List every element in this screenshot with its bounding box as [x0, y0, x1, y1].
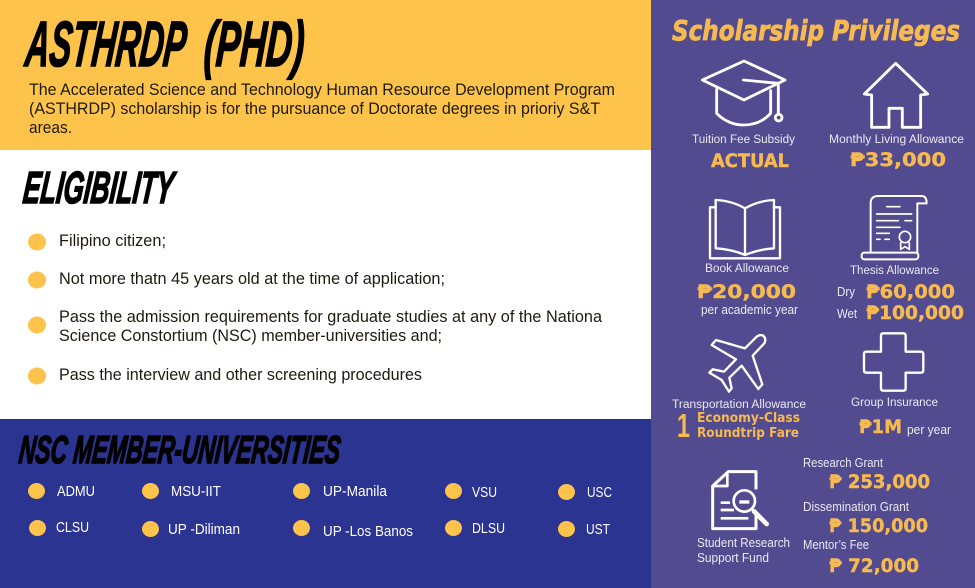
transportation allowance: Economy-Class — [697, 411, 800, 426]
eligibility heading: ELIGIBILITY — [21, 162, 179, 213]
research grant — [803, 455, 930, 493]
university list: CLSU — [56, 519, 89, 536]
icon: airplane — [709, 335, 765, 392]
dissemination grant: ₱ 150,000 — [829, 515, 928, 537]
icon: thesis scroll — [862, 196, 927, 259]
university list: VSU — [472, 484, 497, 501]
program description: (ASTHRDP) scholarship is for the pursuance of Doctorate degrees in prioriy S&T — [29, 100, 600, 118]
transportation allowance — [672, 399, 806, 444]
group insurance: per year — [907, 422, 952, 437]
university list: DLSU — [472, 520, 505, 537]
program description: areas. — [29, 119, 72, 137]
tuition fee subsidy: ACTUAL — [711, 150, 789, 172]
criterion: citizenship: Filipino citizen; — [59, 232, 166, 250]
transportation allowance: Transportation Allowance — [672, 399, 806, 411]
university list: MSU-IIT — [171, 483, 221, 500]
mentor's fee: ₱ 72,000 — [829, 555, 919, 577]
mentor's fee — [803, 537, 919, 577]
tuition fee subsidy — [692, 134, 795, 172]
criterion: admission: Pass the admission requirements for graduate studies at any of the Nationa — [59, 308, 603, 326]
university list: USC — [587, 484, 612, 501]
thesis allowance: Dry — [837, 284, 855, 299]
criterion: admission: Science Constortium (NSC) member-universities and; — [59, 327, 442, 345]
tuition fee subsidy: Tuition Fee Subsidy — [692, 134, 795, 146]
icon: house — [864, 63, 928, 127]
panel: eligibility — [0, 150, 651, 419]
group insurance: ₱1M — [859, 416, 902, 438]
group insurance — [851, 397, 952, 438]
university list: UP-Manila — [323, 483, 388, 500]
panel: NSC member universities — [0, 419, 651, 588]
university list: ADMU — [57, 483, 95, 500]
thesis allowance: ₱100,000 — [866, 302, 964, 324]
monthly living allowance: Monthly Living Allowance — [829, 134, 964, 146]
program description — [29, 81, 615, 137]
book allowance: ₱20,000 — [697, 281, 796, 303]
student research support fund label: Student Research — [697, 535, 790, 550]
book allowance: Book Allowance — [705, 263, 789, 275]
university list: UST — [586, 521, 610, 538]
university list — [28, 483, 612, 540]
group insurance: Group Insurance — [851, 397, 938, 409]
icon: open book — [710, 200, 780, 258]
research grant: Research Grant — [803, 455, 883, 470]
transportation allowance: Roundtrip Fare — [697, 426, 799, 441]
university list: UP -Diliman — [168, 521, 240, 538]
criterion: admission — [28, 308, 603, 345]
icon: medical cross — [864, 333, 923, 391]
monthly living allowance — [829, 134, 964, 171]
dissemination grant — [803, 499, 928, 537]
thesis allowance — [837, 265, 964, 324]
title: ASTHRDP — [22, 8, 190, 80]
dissemination grant: Dissemination Grant — [803, 499, 909, 514]
thesis allowance: Wet — [837, 306, 857, 321]
university list: UP -Los Banos — [323, 523, 413, 540]
student research support fund label: Support Fund — [697, 550, 769, 565]
icon: graduation cap — [702, 61, 785, 125]
thesis allowance: ₱60,000 — [866, 281, 955, 303]
criterion: age: Not more thatn 45 years old at the time of application; — [59, 270, 445, 288]
book allowance: per academic year — [701, 302, 799, 317]
student research support fund label — [697, 535, 790, 565]
thesis allowance: Thesis Allowance — [850, 265, 939, 277]
universities heading: NSC MEMBER-UNIVERSITIES — [17, 429, 343, 472]
criterion: interview: Pass the interview and other screening procedures — [59, 366, 422, 384]
panel: program header — [0, 0, 651, 150]
monthly living allowance: ₱33,000 — [850, 149, 946, 171]
title: (PHD) — [202, 8, 307, 80]
research grant: ₱ 253,000 — [829, 471, 930, 493]
panel: scholarship privileges — [651, 0, 975, 588]
transportation allowance: 1 — [677, 407, 690, 444]
program description: The Accelerated Science and Technology Human Resource Development Program — [29, 81, 615, 99]
book allowance — [697, 263, 799, 317]
icon: document with magnifier — [713, 472, 767, 529]
mentor's fee: Mentor’s Fee — [803, 537, 869, 552]
